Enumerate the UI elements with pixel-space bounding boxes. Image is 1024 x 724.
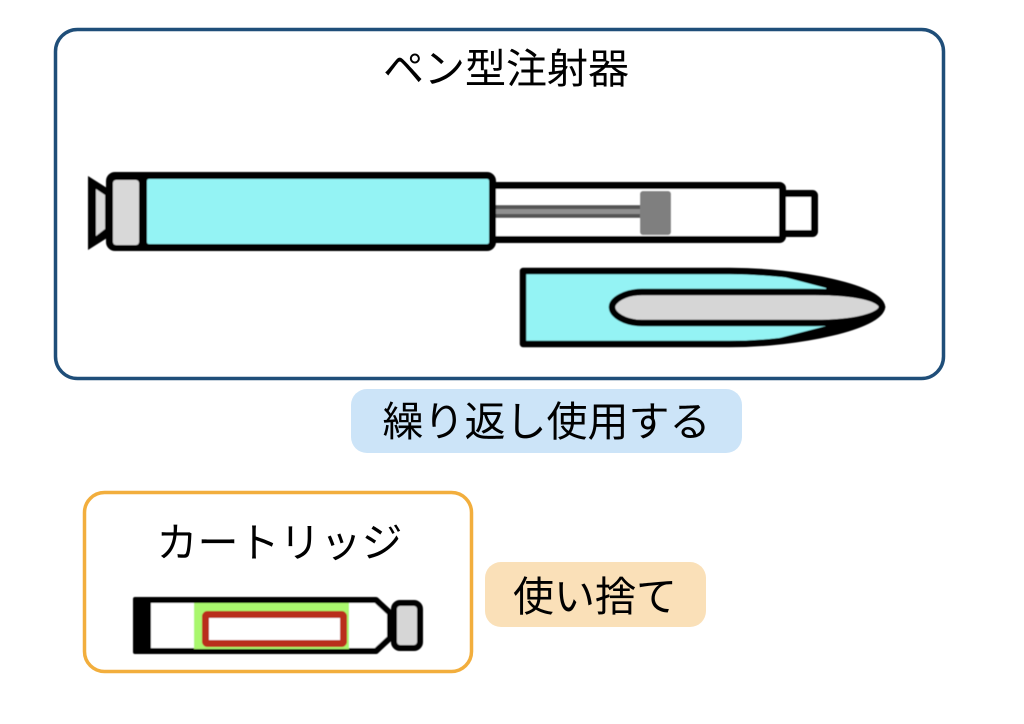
sub-element: cap dark wedge — [760, 272, 882, 343]
icon: pen cap — [523, 271, 882, 344]
sub-element: cap inner needle guard — [612, 292, 882, 323]
sub-element: red window — [206, 614, 344, 644]
sub-element: green label — [194, 603, 349, 649]
sub-element: cyan body — [147, 179, 489, 244]
sub-element: cap shell — [523, 271, 882, 344]
label: reusable: 繰り返し使用する — [382, 399, 710, 445]
sub-element: transparent barrel — [490, 186, 782, 240]
sub-element: main grip — [106, 172, 496, 251]
sub-element: plunger rod — [496, 205, 641, 218]
icon: pen injector body — [88, 172, 814, 251]
sub-element: cartridge body — [136, 600, 390, 651]
heading: cartridge: カートリッジ — [156, 520, 402, 566]
label: reusable — [351, 389, 742, 453]
heading: pen injector: ペン型注射器 — [383, 46, 629, 92]
sub-element: plunger head — [640, 191, 671, 235]
sub-element: black end band — [133, 597, 151, 654]
sub-element: needle-end tip — [782, 194, 814, 234]
panel: cartridge — [84, 492, 472, 672]
sub-element: cartridge cap — [394, 603, 420, 648]
sub-element: grey end section — [113, 180, 139, 245]
label: disposable — [485, 562, 706, 627]
panel: pen injector — [56, 30, 944, 378]
icon: cartridge — [133, 597, 420, 654]
sub-element: dial knob — [88, 176, 107, 250]
label: disposable: 使い捨て — [513, 574, 677, 620]
